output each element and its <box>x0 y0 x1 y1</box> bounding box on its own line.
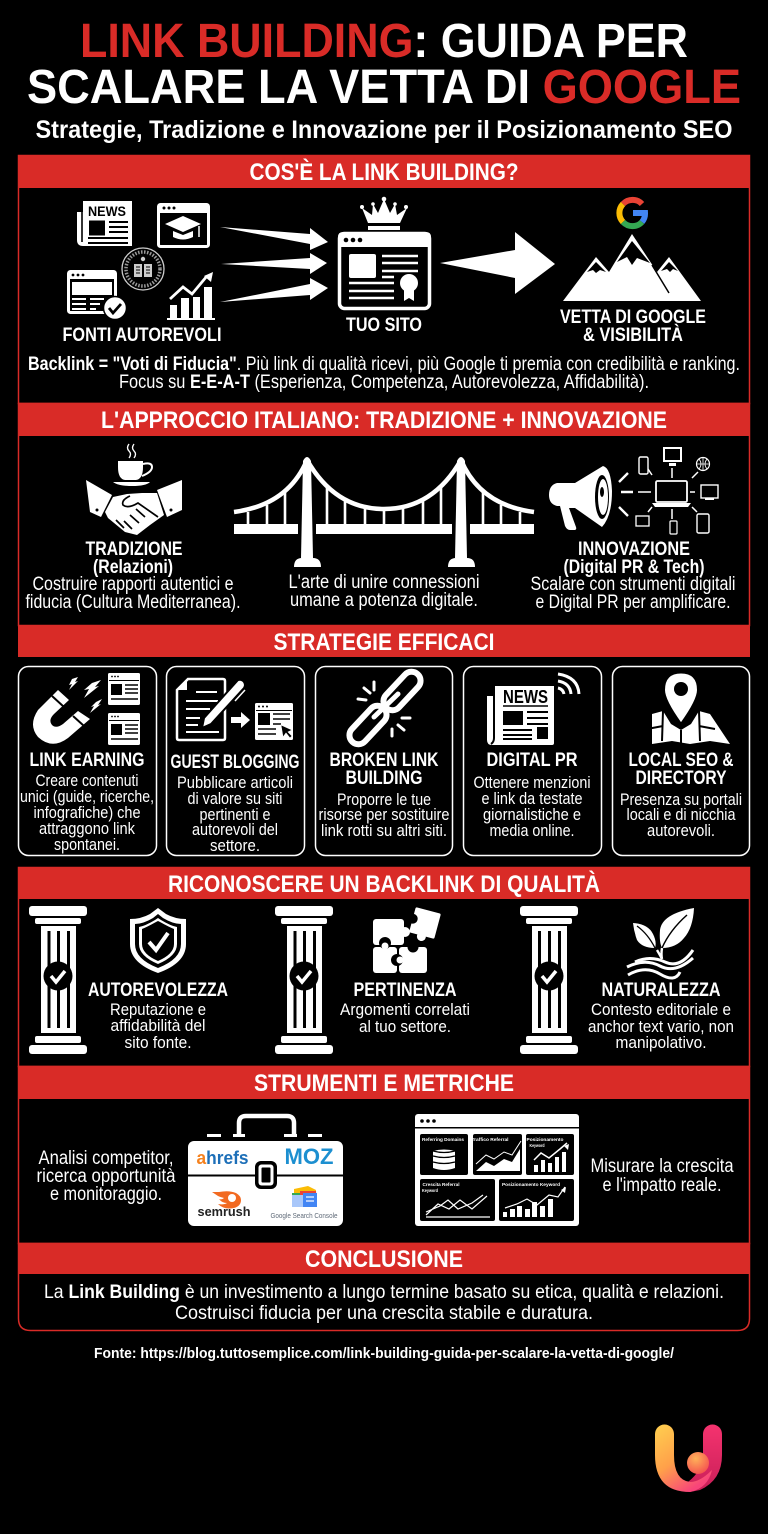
icon: dashboard: Traffico Referral <box>472 1137 508 1142</box>
icon: browser with check <box>68 271 126 320</box>
text: tradizione: Costruire rapporti autentici e <box>32 574 234 595</box>
text: conclusione: La Link Building è un investimento a lungo termine basato su etica, qualità e relazioni. <box>44 1281 724 1303</box>
icon: news with signal: NEWS <box>503 687 548 707</box>
panel: conclusione <box>18 1243 750 1330</box>
text: naturalezza: NATURALEZZA <box>602 980 721 1001</box>
text: naturalezza: anchor text vario, non <box>588 1017 734 1036</box>
text: link earning: Creare contenuti <box>36 771 138 790</box>
icon: newspaper: NEWS <box>88 203 126 219</box>
icon: bridge <box>234 457 534 567</box>
text: naturalezza: manipolativo. <box>616 1033 706 1052</box>
text: local seo: locali e di nicchia <box>626 805 736 824</box>
text: analisi: ricerca opportunità <box>36 1166 176 1187</box>
text: misurare: Misurare la crescita <box>590 1156 734 1177</box>
text: naturalezza: Contesto editoriale e <box>591 1000 731 1019</box>
icon: handshake <box>86 480 182 535</box>
text: digital pr <box>474 773 590 840</box>
icon: growth chart <box>167 272 215 320</box>
icon: seal <box>122 248 164 290</box>
text: guest blogging: Pubblicare articoli <box>177 773 293 792</box>
icon: news with signal <box>487 674 579 745</box>
icon: your site browser <box>338 232 431 308</box>
subtitle: Strategie, Tradizione e Innovazione per il Posizionamento SEO <box>36 116 732 144</box>
text: bridge caption <box>288 572 480 611</box>
icon: dashboard: Posizionamento <box>526 1137 564 1142</box>
heading: broken link building: BROKEN LINK <box>330 750 439 771</box>
logo: ahrefs: ahrefs <box>196 1148 248 1168</box>
icon: dashboard: Keyword <box>422 1188 438 1193</box>
text: analisi: Analisi competitor, <box>38 1148 174 1169</box>
text: analisi <box>36 1148 176 1205</box>
label: tuo sito: TUO SITO <box>346 315 422 336</box>
text: link earning: unici (guide, ricerche, <box>20 787 154 806</box>
heading: broken link building: BUILDING <box>346 768 422 789</box>
icon: document and pencil <box>177 679 293 740</box>
text: autorevolezza: affidabilità del <box>110 1016 206 1035</box>
text: innovazione: e Digital PR per amplificare. <box>536 592 730 613</box>
text: guest blogging: autorevoli del <box>192 820 278 839</box>
heading: strategie efficaci: STRATEGIE EFFICACI <box>274 629 494 656</box>
text: pertinenza: PERTINENZA <box>354 980 457 1001</box>
text: link earning <box>20 771 154 854</box>
text: innovazione: INNOVAZIONE <box>578 539 690 560</box>
text: digital pr: Ottenere menzioni <box>474 773 590 792</box>
heading: local seo <box>628 750 734 789</box>
icon: map pin <box>647 673 730 744</box>
arrow: source to site 1 <box>220 227 328 250</box>
icon: pillar 1 <box>29 906 87 1054</box>
title: SCALARE LA VETTA DI GOOGLE <box>27 61 741 114</box>
logo: google search console: Google Search Console <box>270 1211 338 1220</box>
text: guest blogging: settore. <box>210 836 260 855</box>
icon: dashboard: Keyword <box>530 1143 545 1148</box>
text: pertinenza <box>340 980 470 1036</box>
icon: pillar 3 <box>520 906 578 1054</box>
text: broken link <box>318 790 450 840</box>
icon: megaphone <box>549 466 633 530</box>
panel: strategie heading bar <box>18 625 750 657</box>
panel: strumenti e metriche <box>18 1066 750 1244</box>
label: vetta di google: & VISIBILITÀ <box>583 324 683 346</box>
heading: cos'è: COS'È LA LINK BUILDING? <box>250 158 518 186</box>
text: digital pr: e link da testate <box>482 789 582 808</box>
text: pertinenza: Argomenti correlati <box>340 1000 470 1019</box>
text: broken link: link rotti su altri siti. <box>321 821 447 840</box>
text: local seo <box>620 790 742 840</box>
icon: graduation browser <box>158 204 209 246</box>
arrow: site to google <box>440 232 555 294</box>
heading: local seo: LOCAL SEO & <box>628 750 734 771</box>
icon: digital network <box>636 447 718 534</box>
icon: dashboard: Crescita Referral <box>422 1182 460 1187</box>
text: pertinenza: al tuo settore. <box>359 1017 451 1036</box>
card: local seo <box>612 666 750 856</box>
icon: dashboard: Posizionamento Keyword <box>502 1182 560 1187</box>
heading: approccio italiano: L'APPROCCIO ITALIANO: TRADIZIONE + INNOVAZIONE <box>101 407 667 434</box>
text: misurare <box>590 1156 734 1196</box>
text: misurare: e l'impatto reale. <box>602 1175 722 1196</box>
card: link earning <box>18 666 156 856</box>
text: innovazione: Scalare con strumenti digitali <box>530 574 736 595</box>
text: autorevolezza <box>88 980 228 1052</box>
heading: digital pr: DIGITAL PR <box>486 750 578 771</box>
arrow: source to site 3 <box>220 278 328 302</box>
source line: Fonte: https://blog.tuttosemplice.com/link-building-guida-per-scalare-la-vetta-di-google/ <box>94 1345 675 1362</box>
text: naturalezza <box>588 980 734 1052</box>
text: backlink explanation: Focus su E-E-A-T (Esperienza, Competenza, Autorevolezza, Affidabilità). <box>119 372 649 393</box>
text: bridge caption: umane a potenza digitale. <box>290 590 478 611</box>
logo: semrush <box>198 1191 251 1219</box>
heading: link earning: LINK EARNING <box>30 750 144 771</box>
text: innovazione <box>530 539 736 613</box>
text: bridge caption: L'arte di unire connessioni <box>288 572 480 593</box>
icon: crown <box>360 197 408 230</box>
text: broken link: Proporre le tue <box>337 790 431 809</box>
text: digital pr: giornalistiche e <box>483 805 581 824</box>
text: link earning: spontanei. <box>54 835 120 854</box>
text: tradizione <box>26 539 240 613</box>
card: digital pr <box>464 666 602 856</box>
heading: local seo: DIRECTORY <box>636 768 727 789</box>
icon: toolbox <box>188 1116 343 1226</box>
label: vetta di google <box>560 307 706 346</box>
text: innovazione: (Digital PR & Tech) <box>564 557 704 578</box>
text: link earning: attraggono link <box>39 819 135 838</box>
heading: riconoscere: RICONOSCERE UN BACKLINK DI QUALITÀ <box>168 870 600 898</box>
text: guest blogging: di valore su siti <box>188 789 282 808</box>
logo: semrush: semrush <box>198 1204 251 1219</box>
panel: approccio italiano <box>18 403 750 626</box>
text: broken link: risorse per sostituire <box>318 805 450 824</box>
logo: google search console <box>270 1186 338 1220</box>
text: backlink explanation <box>28 354 740 393</box>
logo: moz: MOZ <box>284 1144 334 1169</box>
text: local seo: Presenza su portali <box>620 790 742 809</box>
text: autorevolezza: sito fonte. <box>124 1033 192 1052</box>
heading: guest blogging: GUEST BLOGGING <box>170 752 300 773</box>
icon: broken chain <box>346 668 424 748</box>
icon: coffee cup <box>113 444 152 486</box>
text: local seo: autorevoli. <box>647 821 715 840</box>
text: conclusione: Costruisci fiducia per una crescita stabile e duratura. <box>175 1302 593 1324</box>
text: tradizione: fiducia (Cultura Mediterranea). <box>26 592 240 613</box>
text: guest blogging <box>177 773 293 855</box>
icon: dashboard <box>415 1114 579 1226</box>
label: vetta di google: VETTA DI GOOGLE <box>560 307 706 328</box>
icon: mountain <box>563 234 701 301</box>
text: autorevolezza: AUTOREVOLEZZA <box>88 980 228 1001</box>
text: conclusione <box>44 1281 724 1324</box>
icon: puzzle <box>373 906 441 973</box>
card: guest blogging <box>166 666 304 856</box>
title: LINK BUILDING: GUIDA PER <box>80 15 688 68</box>
heading: conclusione: CONCLUSIONE <box>305 1246 463 1273</box>
icon: newspaper <box>77 201 132 246</box>
text: autorevolezza: Reputazione e <box>110 1000 206 1019</box>
icon: pillar 2 <box>275 906 333 1054</box>
heading: strumenti: STRUMENTI E METRICHE <box>254 1070 514 1097</box>
panel: riconoscere un backlink di qualità <box>18 867 750 1066</box>
text: tradizione: (Relazioni) <box>93 557 173 578</box>
heading: broken link building <box>330 750 439 789</box>
text: analisi: e monitoraggio. <box>50 1184 162 1205</box>
logo <box>655 1424 722 1492</box>
card: broken link building <box>316 666 452 856</box>
text: link earning: infografiche) che <box>34 803 140 822</box>
text: digital pr: media online. <box>490 821 574 840</box>
label: fonti autorevoli: FONTI AUTOREVOLI <box>62 325 222 346</box>
arrow: source to site 2 <box>221 253 327 274</box>
text: tradizione: TRADIZIONE <box>86 539 182 560</box>
icon: magnet <box>33 673 140 745</box>
text: guest blogging: pertinenti e <box>200 805 270 824</box>
icon: shield <box>130 908 186 973</box>
title <box>27 15 741 114</box>
panel: cos'è la link building <box>18 155 750 404</box>
icon: leaves and water <box>627 908 694 978</box>
icon: google g <box>619 200 645 226</box>
icon: dashboard: Referring Domains <box>422 1137 465 1142</box>
